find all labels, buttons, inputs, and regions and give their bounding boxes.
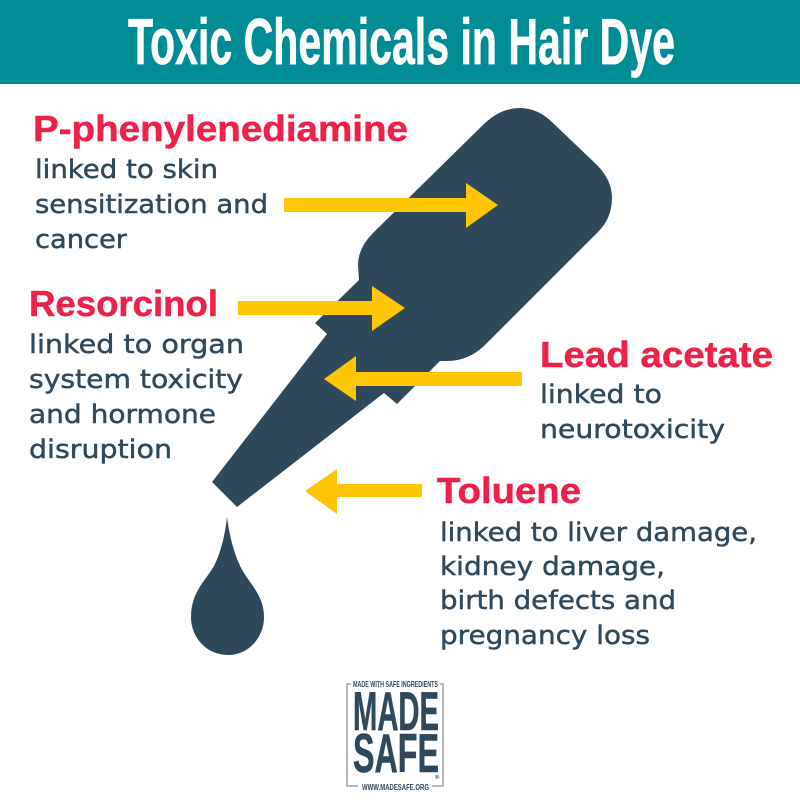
arrow: to nozzle	[305, 469, 422, 514]
text block: Resorcinol: linked to organ	[29, 330, 244, 360]
text block: Toluene: pregnancy loss	[440, 621, 650, 651]
logo: Made Safe: MADE WITH SAFE INGREDIENTS	[353, 679, 438, 689]
text block: P-phenylenediamine	[33, 108, 408, 255]
text block: Resorcinol	[29, 283, 244, 465]
text block: Resorcinol: disruption	[29, 435, 172, 465]
arrow: to bottle neck	[324, 356, 522, 401]
logo: Made Safe: ®	[435, 774, 440, 781]
icon: drop	[191, 517, 264, 655]
text block: Toluene: Toluene	[437, 470, 581, 511]
text block: P-phenylenediamine: linked to skin	[35, 155, 218, 185]
text block: Lead acetate	[540, 334, 773, 445]
logo: Made Safe: WWW.MADESAFE.ORG	[362, 782, 429, 792]
logo: Made Safe: SAFE	[353, 722, 439, 784]
text block: Resorcinol: and hormone	[29, 400, 216, 430]
arrow: to bottle body	[284, 183, 498, 228]
text block: P-phenylenediamine: P-phenylenediamine	[33, 108, 408, 149]
text block: Toluene: kidney damage,	[440, 552, 665, 582]
logo: Made Safe: MADE	[353, 680, 439, 742]
arrow: to bottle shoulder	[238, 286, 405, 331]
text block: Toluene	[437, 470, 757, 651]
text block: Toluene: birth defects and	[440, 586, 676, 616]
text block: Lead acetate: linked to	[540, 380, 662, 410]
text block: Lead acetate: neurotoxicity	[540, 415, 725, 445]
text block: Toluene: linked to liver damage,	[440, 518, 757, 548]
logo: Made Safe	[347, 679, 443, 792]
title banner	[0, 0, 800, 84]
text block: Resorcinol: Resorcinol	[29, 283, 218, 324]
text block: Resorcinol: system toxicity	[29, 365, 243, 395]
text block: Lead acetate: Lead acetate	[540, 334, 773, 375]
icon: dye bottle	[212, 108, 612, 507]
text block: P-phenylenediamine: sensitization and	[35, 190, 268, 220]
text block: P-phenylenediamine: cancer	[35, 225, 127, 255]
